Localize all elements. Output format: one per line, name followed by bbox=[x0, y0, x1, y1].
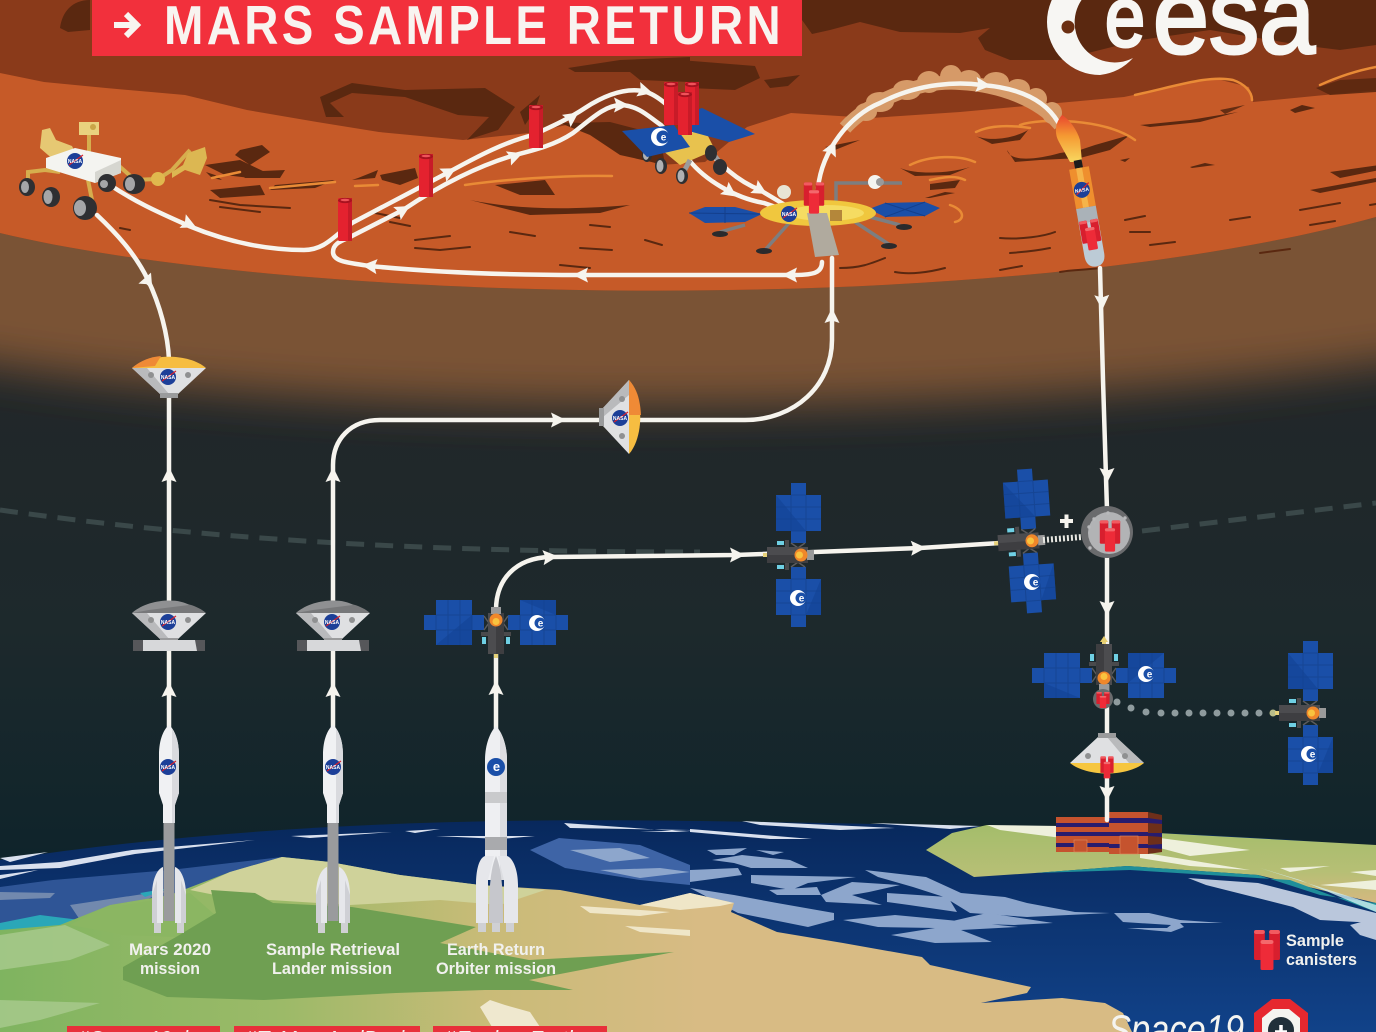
title banner bbox=[92, 0, 802, 56]
ESA mini logo bbox=[487, 758, 505, 776]
Earth entry capsule bbox=[1070, 733, 1144, 778]
mission label: Earth Return Orbiter: Earth Return bbox=[447, 940, 545, 959]
rocket: Earth Return Orbiter bbox=[476, 726, 518, 932]
NASA logo bbox=[160, 759, 176, 775]
NASA logo: NASA bbox=[782, 212, 796, 218]
mission label: Mars 2020: Mars 2020 bbox=[129, 940, 211, 959]
entry capsule in transit to Mars bbox=[599, 380, 641, 454]
mission label: Sample Retrieval Lander: Sample Retrieval bbox=[266, 940, 400, 959]
plus sign bbox=[1060, 514, 1073, 528]
entry capsule arriving at Mars (Mars 2020) bbox=[132, 356, 206, 398]
capsule on cruise stage: Mars 2020 bbox=[132, 600, 206, 651]
mission label: Earth Return Orbiter bbox=[436, 940, 556, 978]
MAV ascent path with smoke bbox=[818, 65, 1062, 188]
Earth bbox=[0, 820, 1376, 1032]
flight path: Mars 2020 mission bbox=[97, 215, 176, 730]
wheels bbox=[19, 174, 145, 220]
orbiter departing bbox=[1275, 641, 1333, 785]
rover traverse paths bbox=[110, 82, 822, 283]
white cloud streaks bbox=[0, 821, 980, 879]
orbiting sample container bbox=[1081, 506, 1133, 558]
NASA logo: NASA bbox=[161, 375, 175, 381]
NASA logo: NASA bbox=[161, 620, 175, 626]
orbiter in cruise bbox=[763, 483, 821, 627]
NASA logo: NASA bbox=[161, 765, 175, 771]
Space19+ wordmark bbox=[1108, 999, 1308, 1032]
ESA mini logo: e bbox=[661, 132, 667, 144]
mission label: Earth Return Orbiter: Orbiter mission bbox=[436, 959, 556, 978]
Mars 2020 rover bbox=[19, 122, 207, 220]
Mars surface main bbox=[0, 73, 1376, 291]
mission label: Sample Retrieval Lander: Lander mission bbox=[272, 959, 392, 978]
arrow icon bbox=[114, 14, 137, 36]
NASA logo: NASA bbox=[1075, 187, 1090, 195]
ESA mini logo: e bbox=[493, 759, 500, 774]
pale upper land bbox=[190, 857, 545, 905]
ESA mini logo bbox=[529, 615, 546, 631]
legend: sample canisters: Sample bbox=[1286, 931, 1344, 950]
ESA mini logo: e bbox=[538, 618, 544, 630]
Mars planet surface bbox=[0, 0, 1376, 291]
NASA logo: NASA bbox=[325, 620, 339, 626]
dark ridge patches bbox=[60, 0, 1376, 60]
rocket: Sample Retrieval Lander bbox=[316, 725, 350, 933]
cruise stage bbox=[133, 640, 205, 651]
right crater field bbox=[825, 67, 1376, 273]
sample fetch rover bbox=[622, 82, 755, 184]
flight path: sample return to Earth bbox=[1094, 268, 1114, 820]
land west bbox=[0, 857, 1132, 1032]
NASA logo bbox=[325, 759, 341, 775]
land east bbox=[926, 825, 1376, 903]
rocket: Mars 2020 bbox=[152, 725, 186, 933]
NASA logo: NASA bbox=[68, 159, 82, 165]
ESA mini logo bbox=[1024, 574, 1040, 590]
NASA logo bbox=[67, 153, 83, 169]
Mars ascent vehicle with flame bbox=[1056, 115, 1106, 268]
flight path: Earth Return Orbiter mission bbox=[488, 540, 1000, 730]
ESA mini logo: e bbox=[799, 594, 805, 604]
ESA logo bbox=[1047, 0, 1316, 76]
space background bbox=[0, 300, 1376, 1032]
upper Mars band bbox=[0, 0, 1376, 291]
sample canisters on the ground bbox=[338, 105, 543, 241]
Mars atmosphere glow bbox=[0, 180, 1376, 407]
ESA mini logo bbox=[1301, 746, 1318, 762]
Earth sample receiving facility bbox=[1056, 812, 1162, 854]
ESA mini logo: e bbox=[1310, 750, 1316, 760]
capsule on cruise stage: Sample Retrieval Lander bbox=[296, 600, 370, 651]
ESA mini logo bbox=[1138, 666, 1154, 682]
legend: sample canisters: canisters bbox=[1286, 950, 1357, 969]
legend: sample canisters bbox=[1254, 930, 1357, 970]
sample retrieval lander bbox=[689, 175, 940, 257]
ESA mini logo: e bbox=[1147, 670, 1153, 680]
green bands west bbox=[0, 925, 110, 1028]
ocean swirl clouds bbox=[570, 848, 1223, 943]
orbiter rendezvous with sample container bbox=[989, 468, 1133, 615]
orbiter departure trail dots bbox=[1114, 698, 1276, 716]
mission label: Sample Retrieval Lander bbox=[266, 940, 400, 978]
path arrowheads bbox=[179, 82, 797, 283]
orbit path dashed line bbox=[0, 503, 1376, 552]
NASA logo bbox=[781, 206, 797, 222]
flight path: Sample Retrieval Lander mission bbox=[326, 258, 840, 730]
dark green land bbox=[123, 890, 674, 1000]
NASA logo: NASA bbox=[613, 416, 627, 422]
ocean tint left bbox=[0, 857, 300, 930]
dark craters and ridges bbox=[320, 83, 515, 140]
Earth Return Orbiter after launch bbox=[424, 600, 568, 658]
orbiter carrying samples to Earth bbox=[1032, 636, 1176, 709]
cruise stage bbox=[297, 640, 369, 651]
NASA logo: NASA bbox=[326, 765, 340, 771]
Space19+ emblem bbox=[1254, 999, 1308, 1032]
ESA mini logo: e bbox=[1033, 578, 1039, 588]
tether bbox=[1043, 537, 1082, 540]
ESA mini logo bbox=[790, 590, 806, 606]
mission label: Mars 2020: mission bbox=[140, 959, 200, 978]
mission label: Mars 2020 bbox=[129, 940, 211, 978]
